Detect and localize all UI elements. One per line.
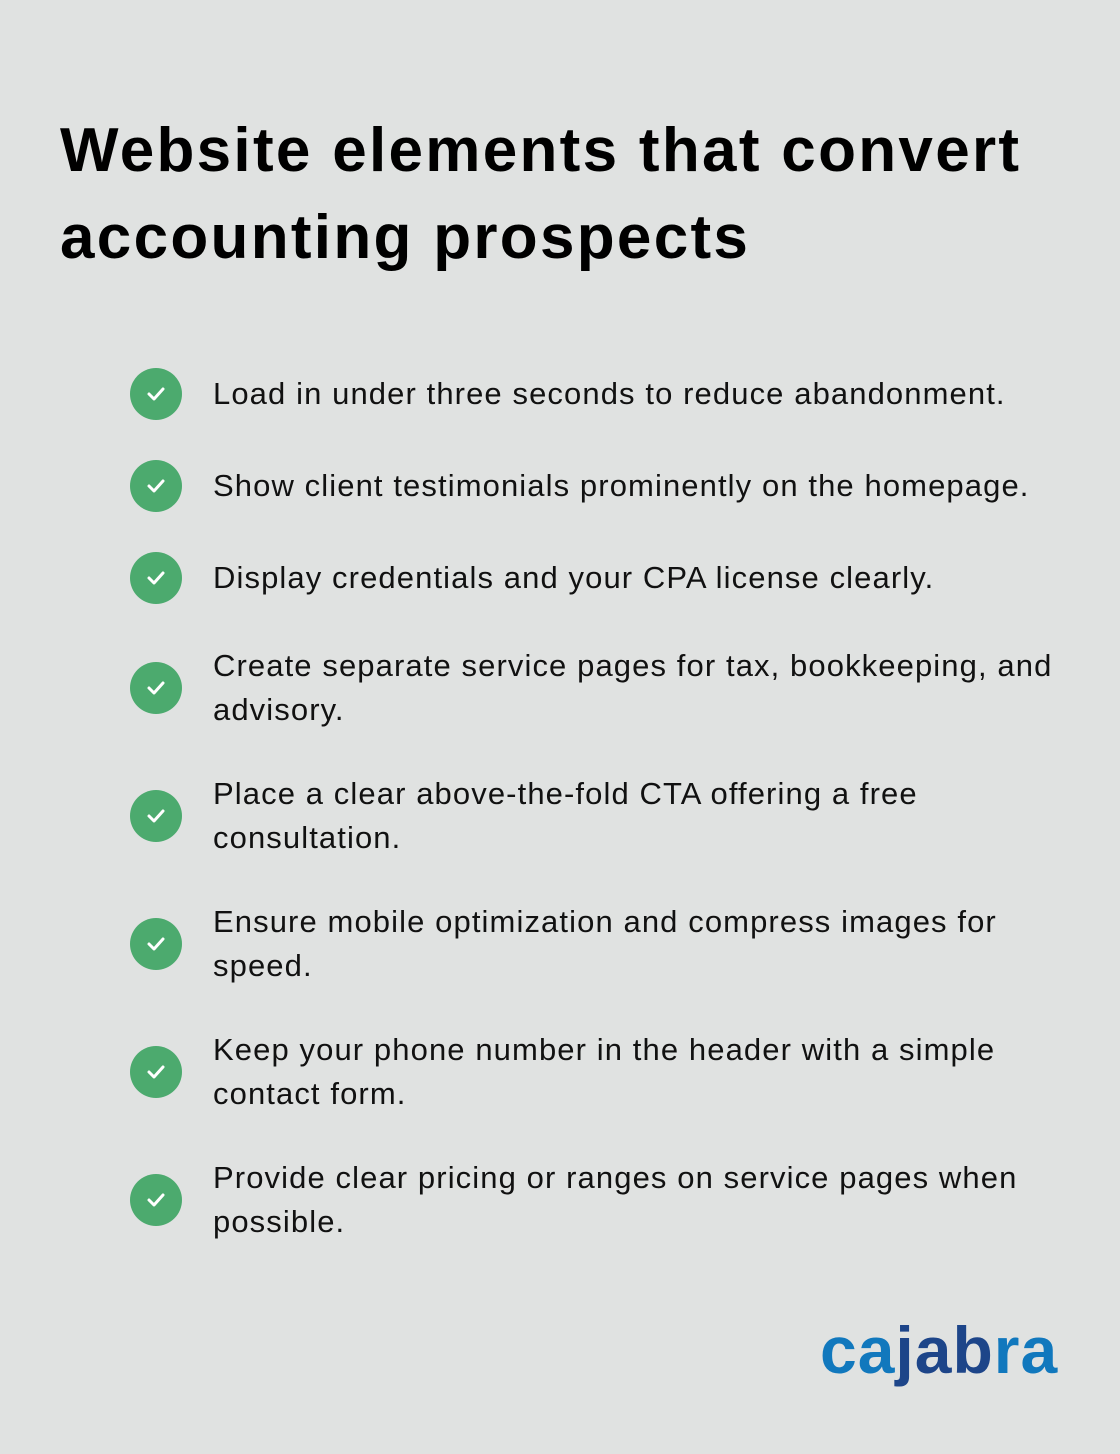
item 6: Ensure mobile optimization and compress images for — [213, 904, 997, 939]
title: accounting prospects — [60, 203, 750, 272]
item 2: Show client testimonials prominently on the homepage. — [213, 468, 1030, 503]
logo: cajabra — [820, 1313, 1058, 1387]
item 8 — [130, 1160, 1017, 1239]
title — [60, 116, 1021, 272]
item 6 — [130, 904, 997, 983]
item 4 — [130, 648, 1052, 727]
item 7: contact form. — [213, 1076, 406, 1111]
item 3: Display credentials and your CPA license clearly. — [213, 560, 934, 595]
item 6: speed. — [213, 948, 313, 983]
item 7: Keep your phone number in the header with a simple — [213, 1032, 995, 1067]
item 1 — [130, 368, 1006, 420]
item 5: Place a clear above-the-fold CTA offering a free — [213, 776, 918, 811]
item 8: possible. — [213, 1204, 345, 1239]
title: Website elements that convert — [60, 116, 1021, 185]
item 8: Provide clear pricing or ranges on service pages when — [213, 1160, 1017, 1195]
item 4: Create separate service pages for tax, bookkeeping, and — [213, 648, 1052, 683]
item 1: Load in under three seconds to reduce abandonment. — [213, 376, 1006, 411]
item 2 — [130, 460, 1030, 512]
item 5 — [130, 776, 918, 855]
item 3 — [130, 552, 934, 604]
item 4: advisory. — [213, 692, 345, 727]
item 7 — [130, 1032, 995, 1111]
item 5: consultation. — [213, 820, 401, 855]
